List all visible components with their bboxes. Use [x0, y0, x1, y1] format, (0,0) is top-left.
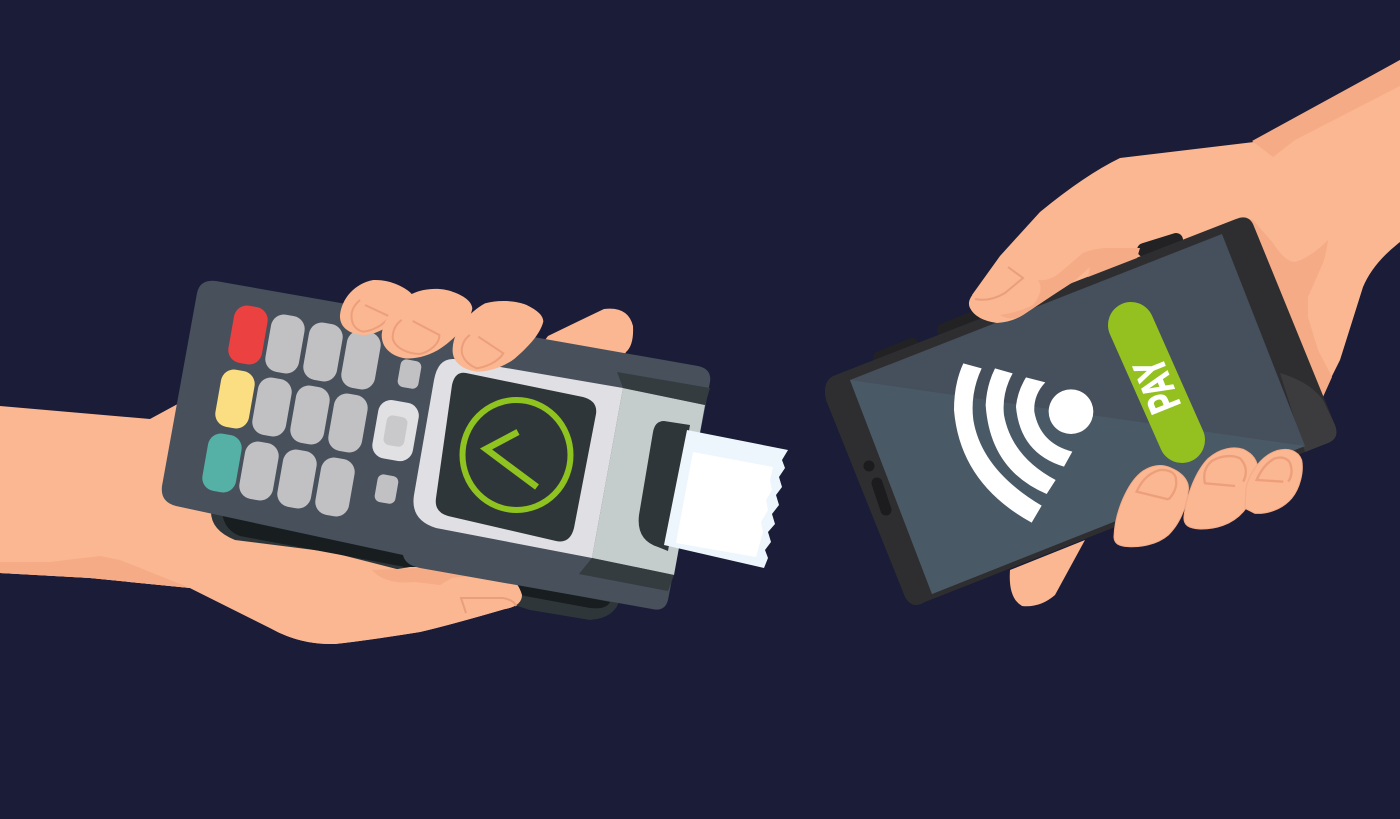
payment terminal: [162, 281, 788, 610]
printer slot: [639, 421, 690, 551]
right hand back: [972, 60, 1400, 606]
screen housing: [413, 359, 623, 558]
side buttons: [880, 240, 1176, 358]
finger 2: [1184, 448, 1258, 529]
thumbnail: [461, 598, 516, 613]
phone body: [825, 217, 1336, 605]
phone hand thumb over phone: [969, 230, 1140, 323]
camera and speaker: [864, 460, 886, 510]
screen lighter reflection: [850, 380, 1305, 594]
terminal hand fingers: [340, 280, 543, 372]
bezel reflection: [1280, 373, 1336, 452]
left hand back with thumb behind terminal: [0, 309, 633, 644]
lower finger behind phone: [1010, 540, 1085, 606]
receipt: [664, 430, 788, 568]
wrist shadow: [1252, 60, 1400, 157]
phone hand fingers: [1114, 448, 1302, 547]
screen top: [850, 234, 1305, 594]
finger 3: [453, 301, 543, 372]
screen: [436, 373, 596, 541]
terminal underside: [211, 480, 620, 620]
finger 3: [1245, 449, 1302, 513]
keypad: [200, 303, 422, 519]
pay button: PAY: [1125, 351, 1190, 420]
contactless wave icon: [954, 363, 1093, 523]
finger 2: [382, 289, 472, 358]
left hand palm and thumb: [0, 556, 522, 644]
smartphone: [825, 217, 1336, 605]
finger 1: [1114, 466, 1188, 547]
finger 1: [340, 280, 412, 335]
terminal body: [162, 281, 710, 610]
palm shadow: [1245, 218, 1332, 397]
green check circle: [462, 400, 570, 510]
